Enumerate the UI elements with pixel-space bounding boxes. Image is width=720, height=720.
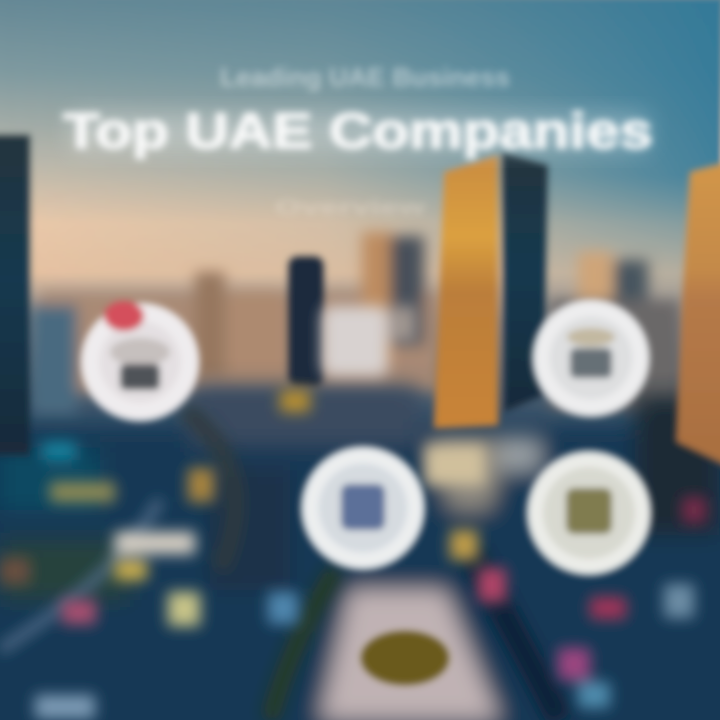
building: central dark tower [288,256,324,386]
central olive emblem [361,631,449,685]
sky background [0,0,720,454]
badge: bottom centre [310,455,416,561]
title glow [70,112,650,152]
city ground [0,385,720,720]
heading: small top line: Leading UAE Business [220,62,510,92]
central pale panel [322,306,416,376]
badge: top left [90,301,190,412]
building: left dark tower [0,135,30,455]
coloured traffic lights [0,390,706,719]
distant skyline [32,232,680,415]
road curves [0,410,560,720]
building: right amber tower [676,160,720,470]
subtitle: Overview [275,197,426,219]
badge: bottom right [535,459,643,567]
building: golden tower [434,152,548,428]
heading: main title: Top UAE Companies [63,103,653,159]
badge: top right [541,308,641,408]
